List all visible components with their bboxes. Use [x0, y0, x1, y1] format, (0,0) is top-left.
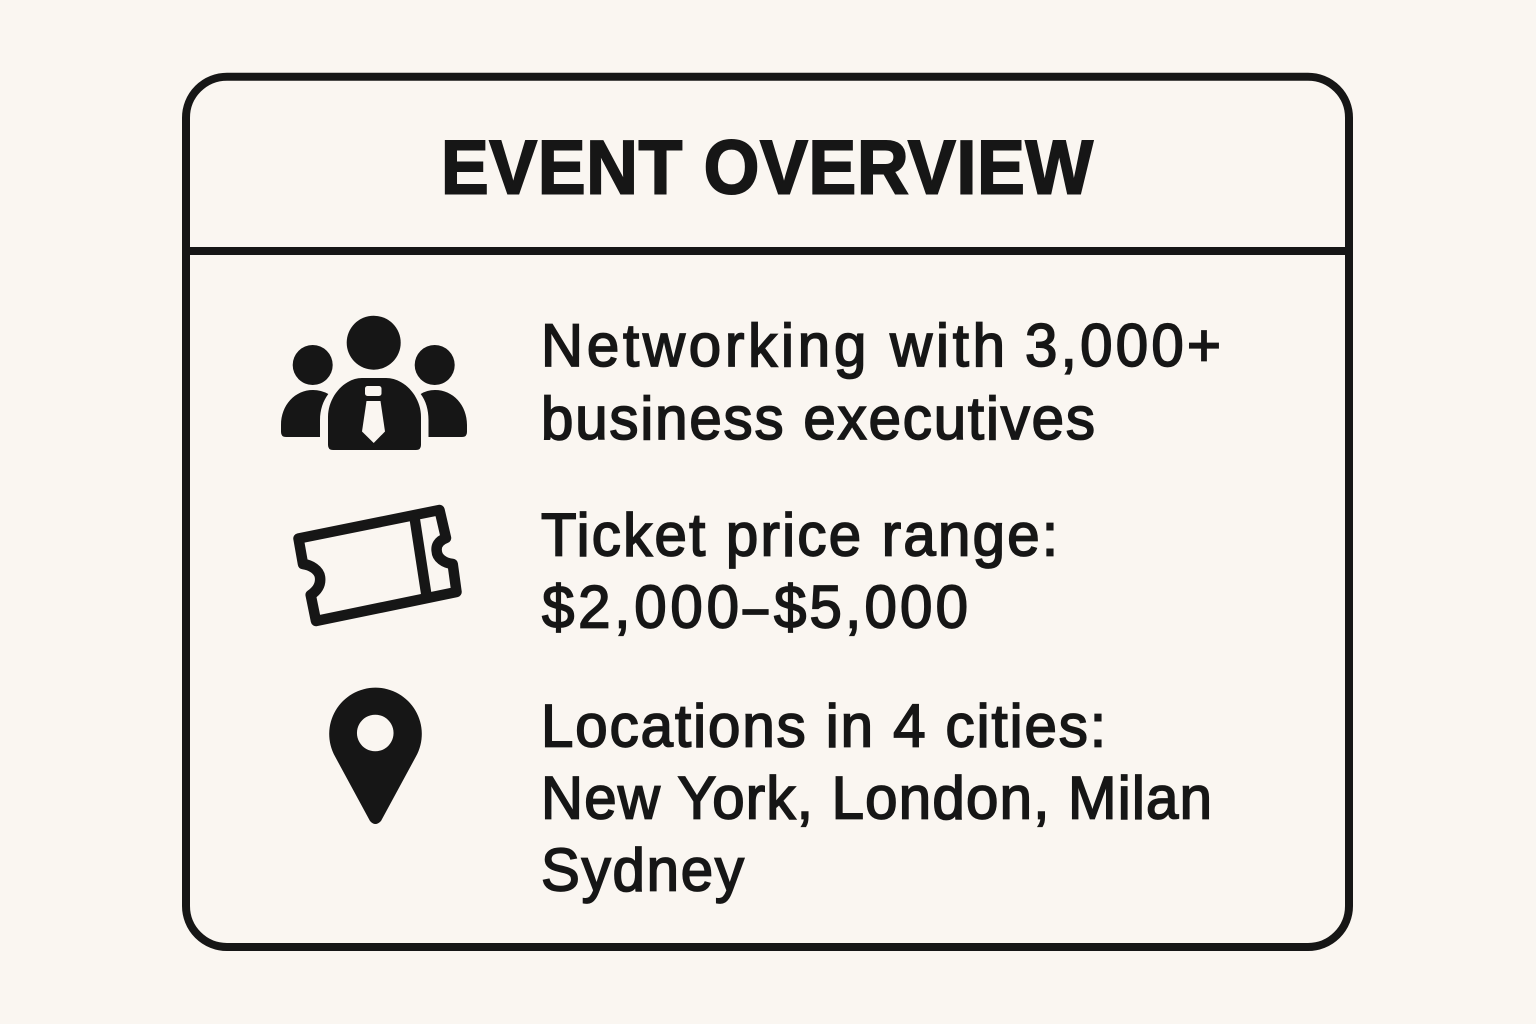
text block: ticket price: $2,000: [542, 573, 739, 641]
panel: event overview card: [186, 77, 1349, 947]
icon: ticket: [298, 510, 456, 621]
text block: locations: Locations in 4 cities:: [541, 692, 1106, 760]
text block: networking: Networking with: [541, 311, 1005, 379]
text block: ticket price: –: [743, 573, 768, 641]
text block: ticket price: Ticket price range:: [541, 501, 1058, 569]
text block: locations: Sydney: [541, 836, 744, 904]
text block: locations: [541, 692, 1212, 904]
icon: business people group: [281, 316, 467, 450]
text block: networking: [541, 311, 1221, 452]
text block: networking: business executives: [541, 384, 1095, 452]
text block: locations: New York, London, Milan: [541, 764, 1212, 832]
text block: networking: 3,000+: [1025, 311, 1221, 379]
icon: location pin: [329, 688, 422, 824]
text block: ticket price: $5,000: [774, 573, 968, 641]
title: EVENT OVERVIEW: [441, 124, 1093, 210]
text block: ticket price: [541, 501, 1058, 641]
